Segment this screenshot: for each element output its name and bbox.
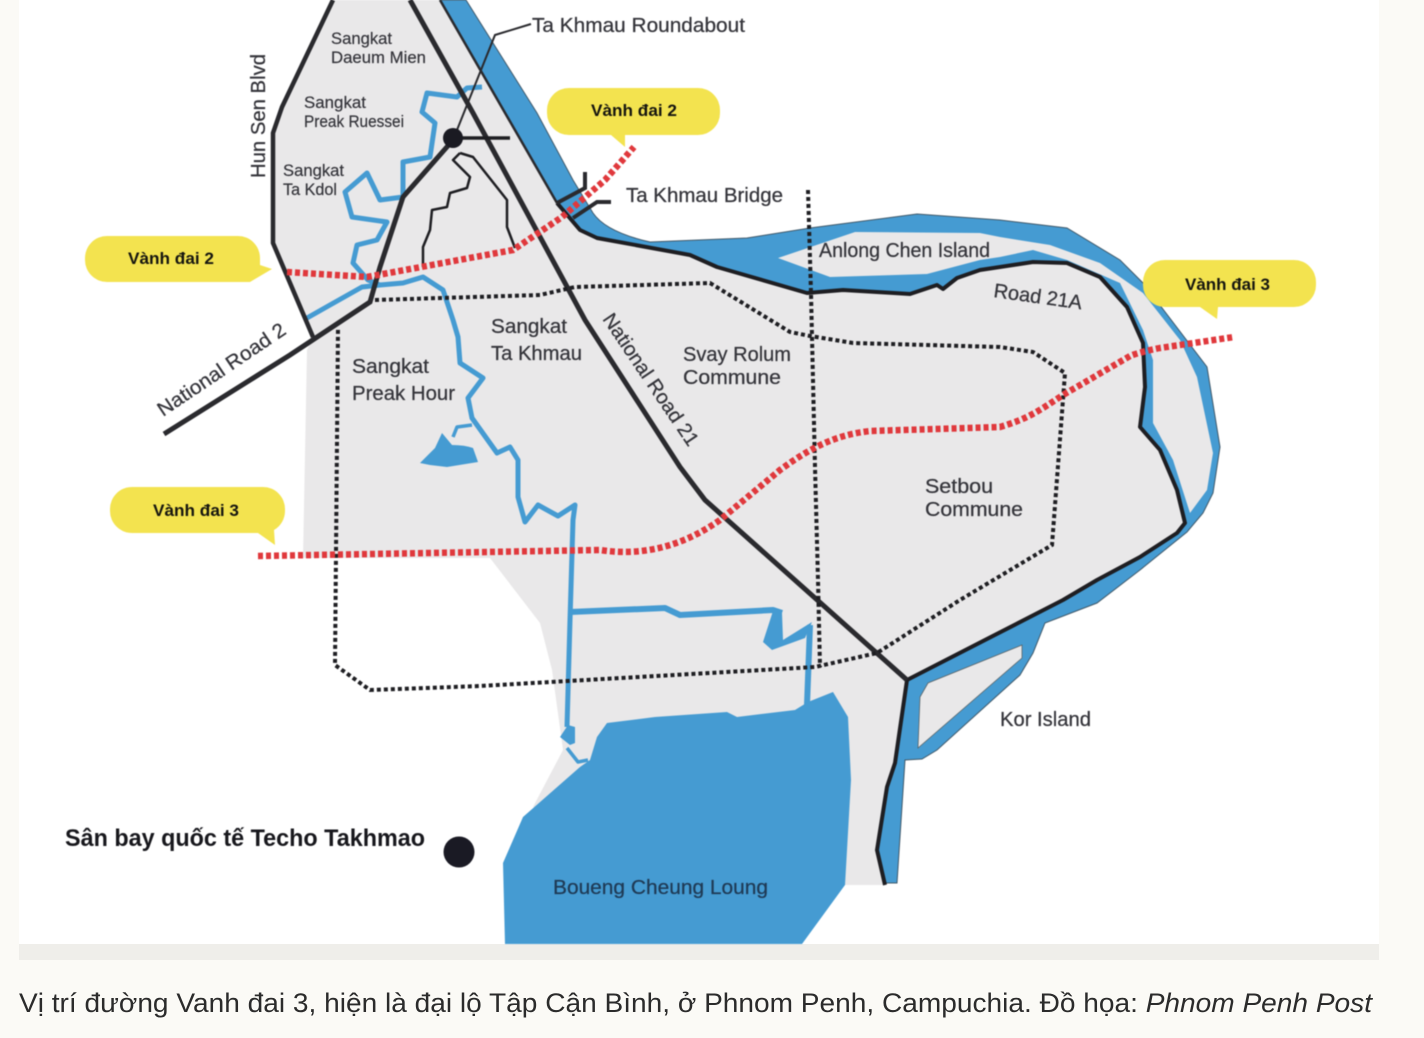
small basin near lake bbox=[560, 725, 575, 745]
callout: Vành đai 3 left: Vành đai 3 bbox=[153, 501, 239, 520]
callout: Vành đai 2 left: Vành đai 2 bbox=[128, 249, 214, 268]
leader line: Ta Khmau Roundabout bbox=[457, 24, 531, 130]
callout: Vành đai 2 left bbox=[85, 236, 272, 282]
label: National Road 2: National Road 2 bbox=[153, 319, 290, 421]
icon: airport marker bbox=[444, 836, 474, 868]
bottom strip under map bbox=[19, 944, 1379, 960]
pond bbox=[420, 433, 478, 467]
callout: Vành đai 2 top: Vành đai 2 bbox=[591, 101, 677, 120]
label: Sangkat Preak Hour: Preak Hour bbox=[352, 383, 455, 405]
lake: Boueng Cheung Loung bbox=[503, 692, 851, 944]
callout: Vành đai 3 right: Vành đai 3 bbox=[1185, 275, 1270, 294]
label: Svay Rolum Commune: Commune bbox=[683, 367, 781, 389]
waterways: thin blue canals bbox=[307, 87, 810, 762]
road: National Road 21 bbox=[410, 0, 907, 680]
map artwork bbox=[65, 0, 1316, 944]
river west bank line bbox=[440, 0, 557, 203]
place labels bbox=[153, 15, 1091, 899]
callout: Vành đai 2 top bbox=[547, 88, 720, 147]
label: Sangkat Ta Kdol: Sangkat bbox=[283, 161, 344, 180]
label: Sangkat Ta Khmau: Sangkat bbox=[491, 316, 567, 338]
icon: Ta Khmau Bridge bbox=[557, 172, 611, 218]
label: Kor Island: Kor Island bbox=[1000, 709, 1091, 731]
label: Anlong Chen Island: Anlong Chen Island bbox=[819, 240, 990, 262]
label: Techo Takhmao airport: Sân bay quốc tế Techo Takhmao bbox=[65, 825, 425, 852]
island: Kor Island bbox=[918, 645, 1022, 748]
label: Sangkat Daeum Mien: Sangkat bbox=[331, 29, 392, 48]
river: Bassac main channel, eastern bend and south channel bbox=[440, 0, 1220, 883]
callout: Vành đai 3 right bbox=[1143, 260, 1316, 319]
road: small black tributaries bbox=[423, 153, 515, 267]
land area bbox=[273, 0, 1185, 885]
label: Sangkat Ta Kdol: Ta Kdol bbox=[283, 180, 337, 199]
label: Ta Khmau Roundabout: Ta Khmau Roundabout bbox=[532, 15, 745, 37]
road: west bank of southern channel bbox=[877, 680, 907, 885]
label: Setbou Commune: Commune bbox=[925, 499, 1023, 521]
red dashed line: Vành đai 3 bbox=[258, 337, 1234, 556]
label: Road 21A: Road 21A bbox=[992, 280, 1084, 314]
road: Road 21A along river bbox=[557, 203, 1185, 680]
dotted vertical boundary bbox=[808, 190, 820, 667]
road: spur from roundabout bbox=[453, 136, 510, 140]
island: Anlong Chen Island bbox=[778, 232, 1213, 513]
label: Svay Rolum Commune: Svay Rolum bbox=[683, 344, 791, 366]
callout: Vành đai 3 left bbox=[110, 487, 285, 545]
road: Hun Sen Blvd bbox=[273, 0, 333, 337]
canal basin bbox=[763, 611, 812, 650]
label: Boueng Cheung Loung: Boueng Cheung Loung bbox=[553, 877, 768, 899]
icon: roundabout marker bbox=[443, 128, 463, 148]
label: Setbou Commune: Setbou bbox=[925, 476, 993, 498]
label: Sangkat Preak Hour: Sangkat bbox=[352, 356, 429, 378]
label: Sangkat Preak Ruessei: Preak Ruessei bbox=[304, 112, 404, 131]
label: National Road 21: National Road 21 bbox=[598, 309, 703, 450]
red dashed line: Vành đai 2 bbox=[287, 147, 634, 277]
label: Sangkat Preak Ruessei: Sangkat bbox=[304, 93, 366, 112]
label: Hun Sen Blvd: Hun Sen Blvd bbox=[248, 54, 270, 178]
label: Sangkat Daeum Mien: Daeum Mien bbox=[331, 48, 426, 67]
road: National Road 2 bbox=[164, 140, 453, 434]
caption: Vị trí đường Vanh đai 3, hiện là đại lộ Tập Cận Bình, ở Phnom Penh, Campuchia. Đồ họa: Phnom Penh Post bbox=[19, 988, 1374, 1018]
label: Sangkat Ta Khmau: Ta Khmau bbox=[491, 343, 582, 365]
label: Ta Khmau Bridge: Ta Khmau Bridge bbox=[626, 185, 783, 207]
dotted commune boundary bbox=[335, 283, 1065, 690]
